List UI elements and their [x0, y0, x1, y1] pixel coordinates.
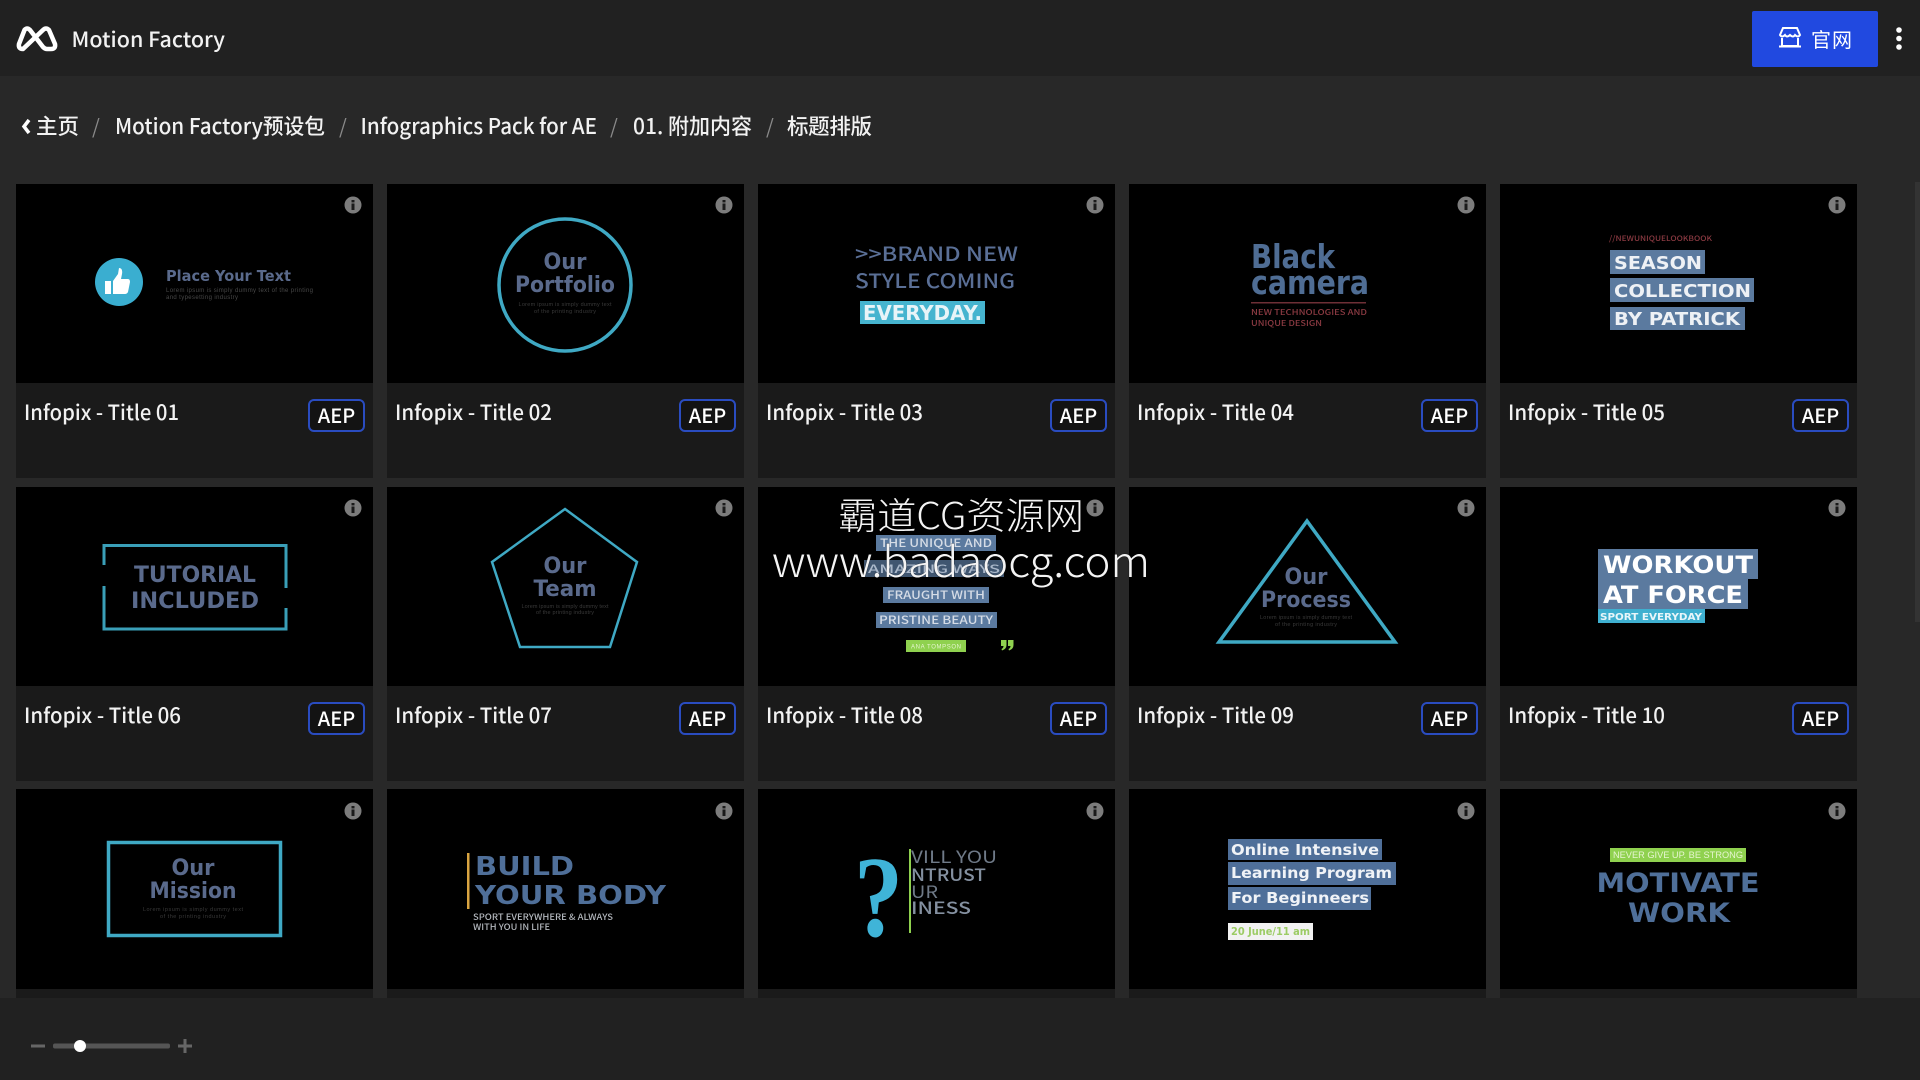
card name: Infopix - Title 07: [395, 700, 552, 730]
card: build your body: [387, 789, 744, 998]
badge: AEP: AEP: [1802, 703, 1839, 732]
thumbnail: thumbs-up title: Lorem ipsum is simply dummy text of the printing: [166, 288, 313, 294]
thumbnail: brand new style: >>BRAND NEW: [855, 238, 1018, 267]
badge: AEP: [1793, 703, 1848, 734]
card: Infopix - Title 06: [16, 487, 373, 781]
thumbnail: black camera: camera: [1251, 263, 1369, 302]
badge: AEP: AEP: [689, 400, 726, 429]
thumbnail: our team pentagon: [492, 509, 637, 647]
thumbnail: thumbs-up title: Place Your Text: [166, 267, 291, 285]
button: official site: [1752, 11, 1878, 67]
thumbnail: will you trust: UR: [911, 878, 938, 903]
thumbnail: brand new style: EVERYDAY.: [863, 301, 982, 325]
thumbnail: our portfolio circle: Our: [544, 250, 587, 275]
card: Infopix - Title 03: [758, 184, 1115, 478]
card name: Infopix - Title 08: [766, 700, 923, 730]
badge: AEP: [1051, 703, 1106, 734]
thumbnail: unique quote: PRISTINE BEAUTY: [879, 612, 994, 628]
thumbnail: brand new style: [855, 238, 1018, 325]
card name: Infopix - Title 01: [24, 397, 179, 427]
badge: AEP: AEP: [689, 703, 726, 732]
breadcrumb navigation: 主页: [36, 110, 79, 141]
icon: info: [344, 500, 362, 516]
thumbnail: our process triangle: [1219, 521, 1395, 642]
icon: info: [1458, 500, 1474, 516]
icon: store: [1779, 28, 1801, 46]
thumbnail: black camera: UNIQUE DESIGN: [1251, 318, 1322, 329]
badge: AEP: AEP: [1431, 703, 1468, 732]
card: our mission: [16, 789, 373, 998]
thumbnail: our portfolio circle: of the printing industry: [534, 309, 596, 315]
thumbnail: build your body: WITH YOU IN LIFE: [473, 921, 550, 933]
card name: Infopix - Title 06: [24, 700, 181, 730]
icon: info: [344, 196, 362, 214]
thumbnail: black camera: Black: [1251, 237, 1336, 276]
thumbnail: online intensive learning: For Beginneers: [1231, 889, 1369, 907]
thumbnail: black camera: [1251, 237, 1369, 329]
card name: Infopix - Title 04: [1137, 397, 1294, 427]
card: online intensive: [1129, 789, 1486, 998]
breadcrumb navigation: /: [92, 111, 100, 140]
thumbnail: black camera: NEW TECHNOLOGIES AND: [1251, 307, 1367, 318]
watermark: www.badaocg.com: [772, 529, 1150, 590]
thumbnail: our mission frame: Lorem ipsum is simply dummy text: [143, 907, 243, 913]
thumbnail: our portfolio circle: Portfolio: [515, 273, 615, 298]
thumbnail: build your body: SPORT EVERYWHERE & ALWAYS: [473, 911, 613, 923]
thumbnail: season collection: //NEWUNIQUELOOKBOOK: [1609, 233, 1712, 244]
badge: AEP: [1422, 703, 1477, 734]
badge: AEP: AEP: [318, 703, 355, 732]
icon: more menu: [1896, 27, 1902, 50]
badge: AEP: AEP: [318, 400, 355, 429]
badge: AEP: [680, 703, 735, 734]
thumbnail: our portfolio circle: Lorem ipsum is simply dummy text: [518, 302, 612, 308]
card name: Infopix - Title 02: [395, 397, 552, 427]
thumbnail: build your body: [467, 852, 667, 933]
zoom slider: [31, 1039, 192, 1053]
brand name: Motion Factory: [72, 24, 226, 54]
badge: AEP: AEP: [1431, 400, 1468, 429]
icon: info: [1828, 500, 1846, 516]
top header bar: [0, 0, 1920, 76]
thumbnail: season collection: SEASON: [1614, 253, 1702, 274]
thumbnail: our team pentagon: Lorem ipsum is simply dummy text: [522, 604, 609, 610]
badge: AEP: AEP: [1060, 703, 1097, 732]
card: Infopix - Title 07: [387, 487, 744, 781]
thumbnail: unique quote: AMAZING WAYS: [868, 561, 1000, 577]
thumbnail: tutorial included: INCLUDED: [131, 589, 259, 614]
watermark: 霸道CG资源网: [838, 486, 1084, 540]
bottom toolbar: [0, 998, 1920, 1080]
badge: AEP: AEP: [1802, 400, 1839, 429]
thumbnail: motivate work: WORK: [1628, 898, 1731, 929]
card name: Infopix - Title 09: [1137, 700, 1294, 730]
breadcrumb navigation: 01. 附加内容: [633, 110, 752, 141]
card: Infopix - Title 09: [1129, 487, 1486, 781]
thumbnail: workout at force: WORKOUT: [1603, 551, 1754, 579]
icon: info: [716, 500, 732, 516]
thumbnail: season collection: COLLECTION: [1614, 281, 1751, 302]
icon: info: [1828, 802, 1846, 820]
thumbnail: online intensive learning: Learning Program: [1231, 864, 1392, 882]
thumbnail: tutorial included: [104, 546, 286, 629]
thumbnail: season collection: [1609, 233, 1754, 330]
icon: info: [1086, 802, 1104, 820]
thumbnail: will you trust: VILL YOU: [911, 843, 997, 868]
icon: info: [344, 802, 362, 820]
thumbnail: motivate work: [1596, 848, 1760, 929]
thumbnail: unique quote: FRAUGHT WITH: [887, 587, 985, 603]
card: Infopix - Title 01: [16, 184, 373, 478]
thumbnail: motivate work: MOTIVATE: [1596, 868, 1760, 899]
card: Infopix - Title 04: [1129, 184, 1486, 478]
thumbnail: online intensive learning: Online Intensive: [1231, 841, 1379, 859]
card: question title: [758, 789, 1115, 998]
thumbnail: unique quote: [864, 535, 1014, 652]
thumbnail: season collection: BY PATRICK: [1614, 309, 1741, 330]
thumbnail: our mission frame: Mission: [150, 879, 236, 904]
thumbnail: our mission frame: of the printing industry: [160, 914, 226, 920]
card: motivate work: [1500, 789, 1857, 998]
icon: info: [1086, 500, 1104, 516]
icon: info: [1086, 196, 1104, 214]
breadcrumb navigation: [24, 110, 872, 141]
card: Infopix - Title 08: [758, 487, 1115, 781]
scrollbar: [1915, 182, 1920, 622]
icon: closing quote: [1001, 640, 1014, 650]
card name: Infopix - Title 03: [766, 397, 923, 427]
thumbnail: workout at force: [1598, 549, 1758, 623]
card name: Infopix - Title 10: [1508, 700, 1665, 730]
icon: info: [1458, 196, 1474, 214]
thumbnail: motivate work: NEVER GIVE UP. BE STRONG: [1613, 850, 1743, 860]
thumbnail: our team pentagon: Team: [534, 577, 596, 602]
icon: info: [716, 196, 732, 214]
breadcrumb navigation: /: [766, 111, 774, 140]
thumbnail: our mission frame: Our: [172, 856, 215, 881]
thumbnail: our team pentagon: Our: [544, 554, 587, 579]
badge: AEP: [1422, 400, 1477, 431]
card: Infopix - Title 02: [387, 184, 744, 478]
thumbnail: our process triangle: Our: [1284, 565, 1328, 590]
breadcrumb navigation: 标题排版: [787, 110, 872, 141]
thumbnail: tutorial included: TUTORIAL: [134, 563, 256, 588]
breadcrumb navigation: /: [610, 111, 618, 140]
icon: Motion Factory logo: [19, 28, 55, 49]
thumbnail: will you trust: [854, 834, 997, 962]
thumbnail: online intensive learning: 20 June/11 am: [1231, 926, 1310, 938]
thumbnail: our process triangle: Process: [1261, 588, 1351, 613]
icon: info: [1458, 802, 1474, 820]
breadcrumb navigation: Infographics Pack for AE: [360, 110, 597, 141]
badge: AEP: AEP: [1060, 400, 1097, 429]
watermark: [772, 486, 1150, 590]
thumbnail: workout at force: SPORT EVERYDAY: [1600, 612, 1702, 623]
thumbnail: build your body: BUILD: [475, 852, 574, 882]
thumbnail: online intensive learning: [1228, 839, 1396, 940]
thumbnail: our mission frame: [108, 842, 280, 936]
thumbnail: our process triangle: of the printing industry: [1275, 622, 1337, 628]
breadcrumb navigation: Motion Factory预设包: [115, 110, 325, 141]
thumbnail: workout at force: AT FORCE: [1603, 581, 1743, 609]
badge: AEP: [680, 400, 735, 431]
thumbnail: thumbs-up title: [95, 258, 313, 306]
thumbnail: unique quote: THE UNIQUE AND: [880, 535, 992, 551]
thumbnail: will you trust: NTRUST: [911, 861, 986, 886]
thumbnail: unique quote: ANA TOMPSON: [911, 644, 961, 650]
thumbnail: will you trust: ?: [854, 834, 903, 962]
thumbnail: our team pentagon: of the printing industry: [536, 610, 594, 616]
badge: AEP: [309, 400, 364, 431]
card: Infopix - Title 05: [1500, 184, 1857, 478]
thumbnail: our process triangle: Lorem ipsum is simply dummy text: [1260, 615, 1352, 621]
thumbnail: build your body: YOUR BODY: [474, 881, 667, 911]
badge: AEP: [1793, 400, 1848, 431]
badge: AEP: [309, 703, 364, 734]
thumbnail: our portfolio circle: [499, 219, 631, 351]
badge: AEP: [1051, 400, 1106, 431]
thumbnail: thumbs-up title: and typesetting industry: [166, 295, 238, 301]
card name: Infopix - Title 05: [1508, 397, 1665, 427]
thumbnail: will you trust: INESS: [911, 894, 971, 919]
icon: info: [1828, 196, 1846, 214]
card: Infopix - Title 10: [1500, 487, 1857, 781]
button label: 官网: [1811, 24, 1852, 53]
icon: info: [716, 802, 732, 820]
breadcrumb navigation: /: [339, 111, 347, 140]
thumbnail: brand new style: STYLE COMING: [855, 265, 1015, 294]
